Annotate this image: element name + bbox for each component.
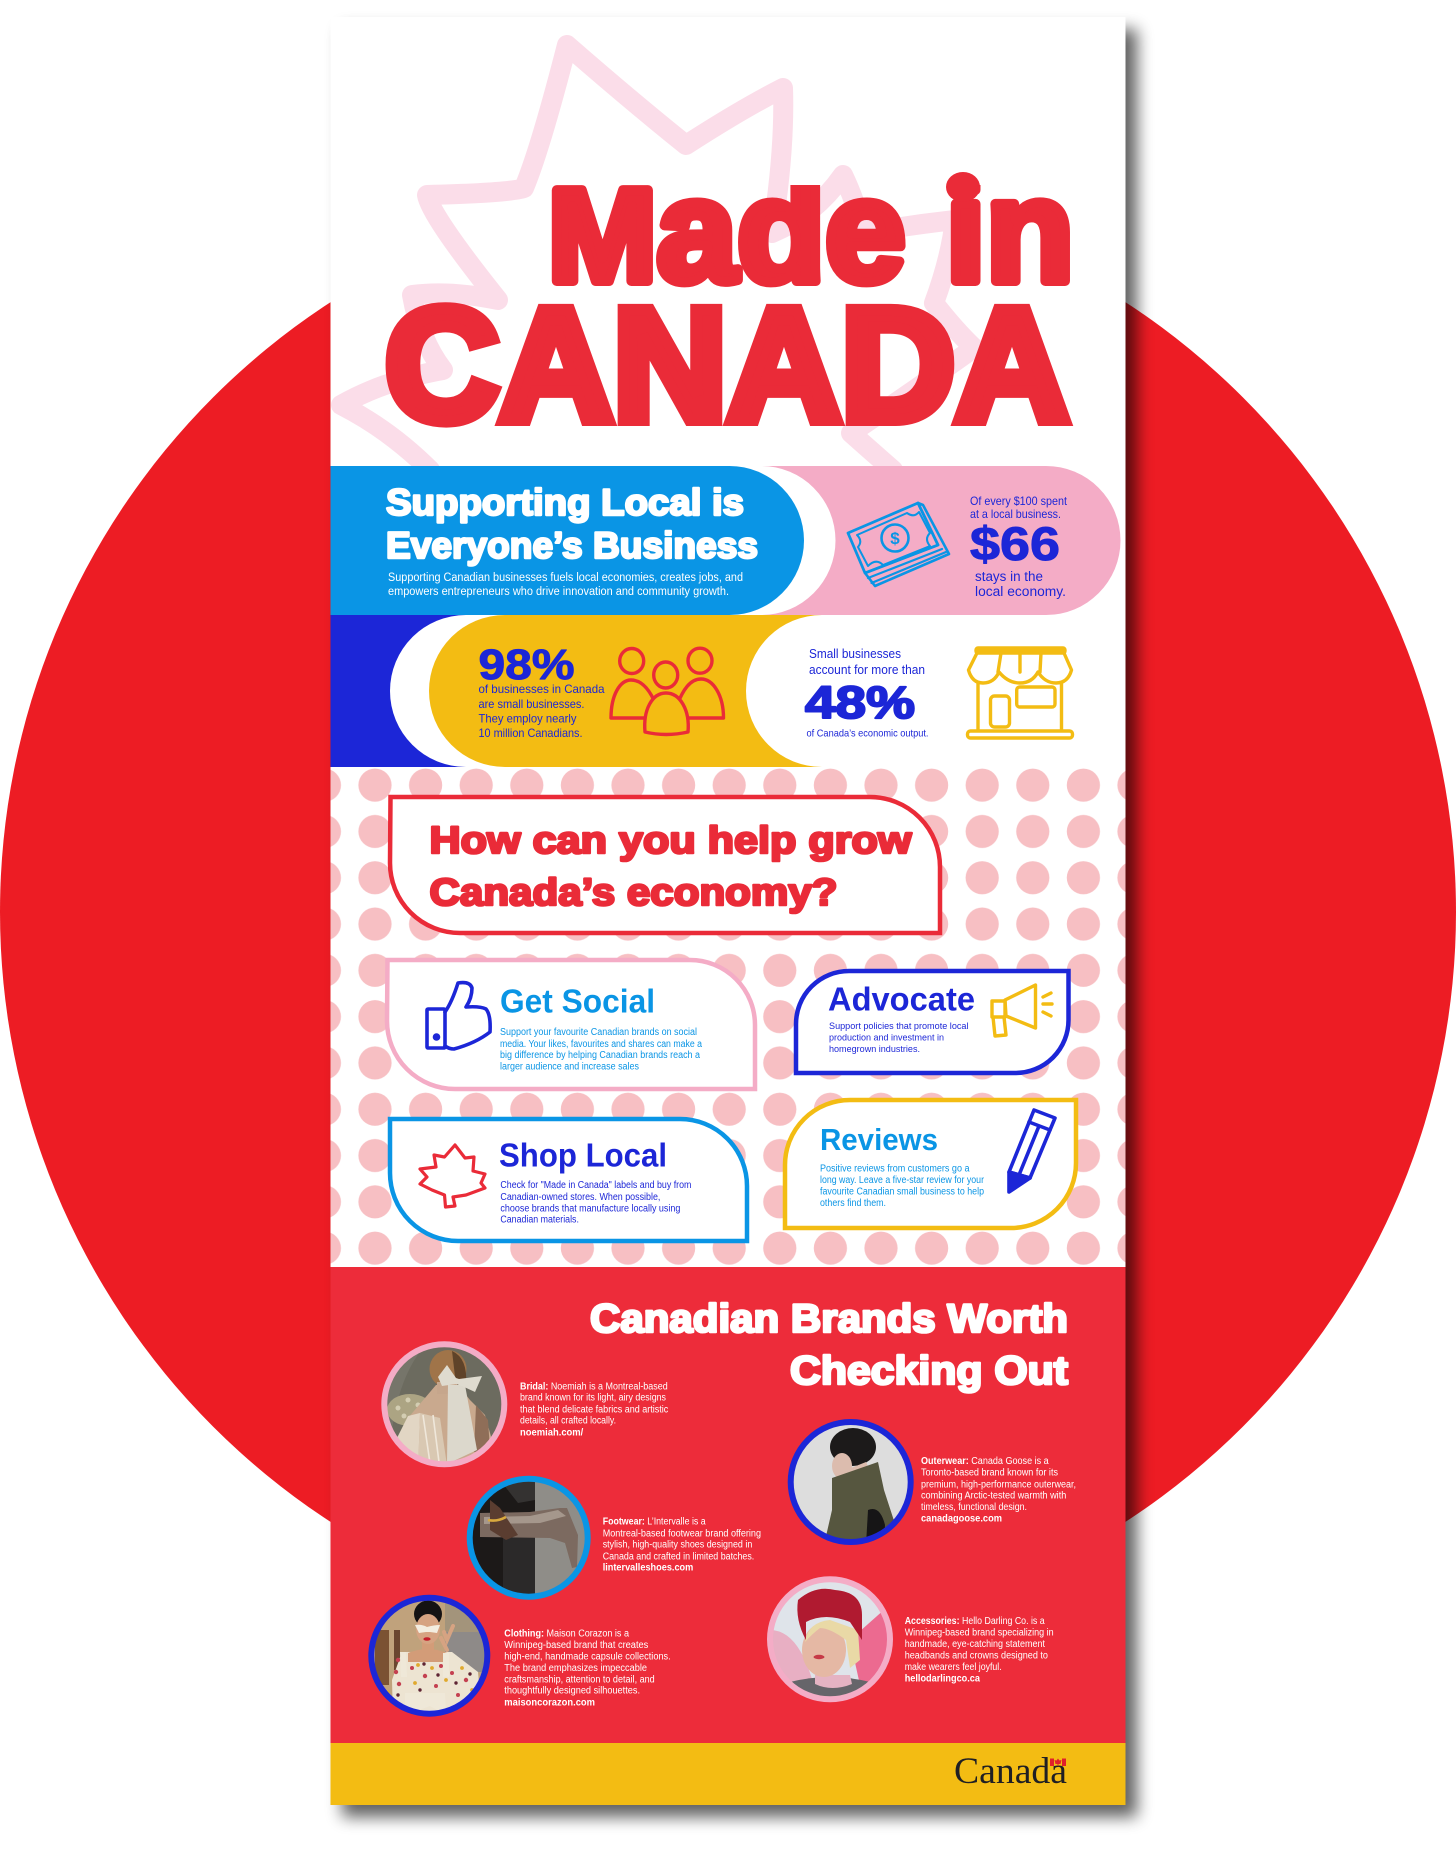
- panel: Advocate: Advocate: [828, 980, 975, 1018]
- photo: floral dress: [368, 1594, 490, 1717]
- icon: storefront: [968, 648, 1072, 738]
- brand: Bridal: that blend delicate fabrics and artistic: [520, 1404, 668, 1415]
- brand: Footwear: Canada and crafted in limited batches.: [603, 1551, 754, 1562]
- stat: 98%: [478, 648, 604, 737]
- icon: money stack: $: [890, 529, 900, 548]
- panel: Get Social: big difference by helping Canadian brands reach a: [500, 1050, 700, 1061]
- panel: dark blue block: [330, 615, 470, 767]
- stat: $66: at a local business.: [970, 507, 1061, 521]
- stat: 48%: Small businesses: [809, 647, 901, 661]
- brand: Bridal: noemiah.com/: [520, 1427, 583, 1438]
- panel: Reviews: [785, 1100, 1076, 1228]
- brand: Outerwear: premium, high-performance outerwear,: [921, 1479, 1076, 1490]
- brand: Outerwear: canadagoose.com: [921, 1514, 1002, 1525]
- brand: Accessories: handmade, eye-catching statement: [905, 1639, 1045, 1650]
- icon: flag: [1050, 1758, 1066, 1766]
- brand: Outerwear: Toronto-based brand known for its: [921, 1468, 1058, 1479]
- brand: Outerwear: [785, 1420, 1076, 1545]
- panel: Advocate: production and investment in: [829, 1033, 944, 1044]
- brand: Outerwear: combining Arctic-tested warmth with: [921, 1491, 1066, 1502]
- panel: yellow stat band: [390, 615, 1126, 767]
- panel: Shop Local: Canadian materials.: [500, 1215, 579, 1226]
- brand: Bridal: Bridal: Noemiah is a Montreal-based: [520, 1381, 668, 1392]
- stat: $66: local economy.: [975, 584, 1066, 599]
- photo: vest: [785, 1420, 915, 1545]
- panel: question heading: How can you help grow: [430, 820, 912, 862]
- stat: 48%: [805, 647, 928, 740]
- maple leaf outline background: [341, 45, 974, 470]
- panel: Get Social: larger audience and increase sales: [500, 1062, 639, 1072]
- background red circle: [0, 184, 1456, 1640]
- panel: Shop Local: Shop Local: [499, 1136, 667, 1174]
- stat: $66: stays in the: [975, 569, 1043, 584]
- icon: money stack: [848, 503, 949, 586]
- dot pattern section: [330, 767, 1126, 1267]
- brand: Clothing: The brand emphasizes impeccable: [504, 1663, 647, 1674]
- white gap: [740, 466, 836, 615]
- stat: 98%: They employ nearly: [478, 712, 576, 726]
- stat: $66: [970, 494, 1068, 599]
- brand: Accessories: hellodarlingco.ca: [905, 1674, 980, 1685]
- brand: Clothing: Winnipeg-based brand that creates: [504, 1640, 648, 1651]
- brand: Clothing: craftsmanship, attention to detail, and: [504, 1674, 655, 1685]
- panel: Get Social: Support your favourite Canadian brands on social: [500, 1027, 697, 1038]
- panel: Get Social: [387, 960, 755, 1089]
- heading: Canadian Brands Worth Checking Out: Canadian Brands Worth: [590, 1297, 1068, 1341]
- icon: maple leaf: [420, 1145, 485, 1207]
- panel: Reviews: Positive reviews from customers go a: [820, 1164, 970, 1175]
- panel: question heading: Canada’s economy?: [430, 872, 838, 914]
- brand: Bridal: details, all crafted locally.: [520, 1416, 616, 1427]
- icon: pencil: [1009, 1110, 1055, 1192]
- stat: 48%: 48%: [805, 677, 915, 728]
- heading: Canadian Brands Worth Checking Out: Checking Out: [790, 1349, 1068, 1393]
- icon: megaphone: [992, 985, 1052, 1036]
- brand: Clothing: thoughtfully designed silhouettes.: [504, 1686, 640, 1697]
- Canada wordmark: Canada: [954, 1751, 1067, 1792]
- brand: Accessories: headbands and crowns designed to: [905, 1650, 1048, 1661]
- stat: $66: Of every $100 spent: [970, 494, 1068, 508]
- brand: Footwear: lintervalleshoes.com: [603, 1563, 693, 1574]
- title line: Made in: [552, 172, 1070, 288]
- panel: Reviews: favourite Canadian small business to help: [820, 1186, 984, 1197]
- panel: Reviews: long way. Leave a five-star review for your: [820, 1175, 985, 1186]
- panel: Advocate: homegrown industries.: [829, 1044, 920, 1055]
- brand: Clothing: maisoncorazon.com: [504, 1697, 595, 1708]
- stat: 98%: 10 million Canadians.: [478, 726, 582, 740]
- photo: red headdress: [765, 1575, 895, 1705]
- brand: Bridal: [380, 1340, 668, 1472]
- brand: Outerwear: Outerwear: Canada Goose is a: [921, 1456, 1049, 1467]
- brand: Footwear: stylish, high-quality shoes designed in: [603, 1540, 752, 1551]
- panel: Shop Local: Canadian-owned stores. When possible,: [500, 1192, 660, 1203]
- icon: people: [611, 648, 724, 734]
- title line: CANADA: CANADA: [385, 275, 1069, 454]
- brand: Footwear: [465, 1475, 761, 1600]
- brand: Accessories: Winnipeg-based brand specializing in: [905, 1628, 1054, 1639]
- poster: [330, 17, 1126, 1805]
- panel: Reviews: Reviews: [820, 1122, 938, 1157]
- intro body text: [388, 572, 743, 598]
- panel: Get Social: media. Your likes, favourites and shares can make a: [500, 1039, 702, 1050]
- panel: Shop Local: choose brands that manufacture locally using: [500, 1204, 680, 1214]
- footer band: [330, 1743, 1126, 1805]
- brand: Clothing: high-end, handmade capsule collections.: [504, 1651, 671, 1662]
- brand: Clothing: [365, 1595, 671, 1725]
- panel: Reviews: others find them.: [820, 1198, 886, 1209]
- panel: pink stat band: [763, 466, 1120, 615]
- brand: Bridal: brand known for its light, airy designs: [520, 1393, 666, 1404]
- panel: Canadian brands: [330, 1267, 1126, 1743]
- heading: Supporting Local is Everyone's Business: Everyone’s Business: [386, 525, 758, 566]
- stat: 48%: of Canada’s economic output.: [806, 728, 928, 740]
- brand: Outerwear: timeless, functional design.: [921, 1502, 1027, 1513]
- poster shadow: [342, 29, 1137, 1817]
- panel: question heading: [390, 797, 940, 933]
- stat: 48%: account for more than: [809, 663, 925, 677]
- heading: Supporting Local is Everyone's Business: Supporting Local is: [386, 482, 744, 523]
- panel: Shop Local: [390, 1119, 747, 1241]
- brand: Footwear: Footwear: L’Intervalle is a: [603, 1517, 706, 1528]
- panel: Shop Local: Check for "Made in Canada" labels and buy from: [500, 1180, 691, 1191]
- heading: Canadian Brands Worth Checking Out: [590, 1297, 1068, 1393]
- stat: $66: $66: [970, 517, 1060, 570]
- brand: Accessories: [765, 1575, 1054, 1705]
- brand: Clothing: Clothing: Maison Corazon is a: [504, 1629, 629, 1640]
- stat: 98%: 98%: [478, 641, 574, 689]
- panel: blue intro band: [330, 466, 804, 615]
- intro body text: Supporting Canadian businesses fuels local economies, creates jobs, and: [388, 572, 743, 584]
- panel: Get Social: Get Social: [500, 982, 655, 1020]
- stat: 98%: of businesses in Canada: [478, 682, 605, 696]
- brand: Accessories: Accessories: Hello Darling Co. is a: [905, 1616, 1045, 1627]
- title: [386, 172, 1074, 428]
- heading: Supporting Local is Everyone's Business: [386, 482, 758, 566]
- panel: Advocate: Support policies that promote local: [829, 1021, 968, 1032]
- icon: thumbs up: [427, 983, 490, 1049]
- stat: 98%: are small businesses.: [478, 697, 584, 711]
- panel: Advocate: [796, 971, 1068, 1073]
- intro body text: empowers entrepreneurs who drive innovation and community growth.: [388, 586, 729, 598]
- brand: Accessories: make wearers feel joyful.: [905, 1662, 1002, 1673]
- photo: boot: [465, 1475, 595, 1600]
- title line: Made in: Made in: [548, 149, 1074, 312]
- photo: bride with bow: [380, 1340, 510, 1472]
- brand: Footwear: Montreal-based footwear brand offering: [603, 1528, 761, 1539]
- i dot: [946, 172, 980, 202]
